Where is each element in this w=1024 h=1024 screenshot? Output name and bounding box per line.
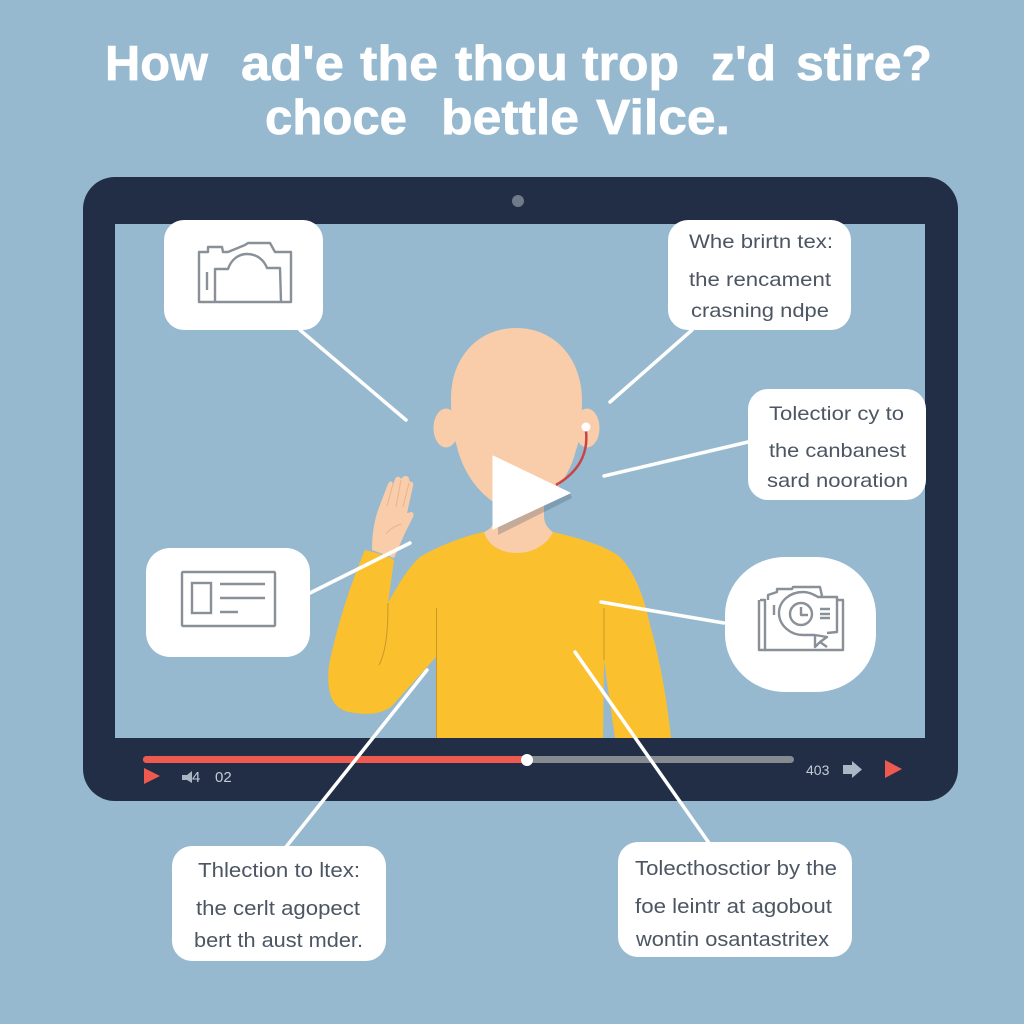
title: ad'e (241, 37, 344, 91)
icon: left play (144, 768, 160, 784)
current time (192, 769, 232, 786)
head and ears (434, 328, 600, 510)
panel: bottom left text card: bert th aust mder. (194, 930, 363, 952)
panel: top right text card: Whe brirtn tex: (689, 231, 833, 253)
panel: middle right text card: the canbanest (769, 440, 907, 462)
neck (482, 495, 554, 567)
panel: middle right text card: sard nooration (767, 470, 908, 492)
panel: id card icon card (146, 548, 310, 657)
icon: forward arrow (843, 761, 862, 778)
title: z'd (711, 37, 776, 91)
title (105, 37, 932, 145)
icon: play button (493, 456, 572, 535)
panel: bottom left text card: Thlection to ltex: (198, 860, 360, 882)
title: stire? (796, 37, 932, 91)
title: bettle (441, 91, 579, 145)
current time: 02 (215, 769, 232, 786)
panel: bottom right text card: wontin osantastritex (635, 929, 829, 951)
icon: camera (199, 243, 291, 302)
icon: raised hand (372, 476, 414, 558)
panel: top right text card: crasning ndpe (691, 300, 829, 322)
panel: bottom right text card: foe leintr at agobout (635, 896, 832, 918)
title: How (105, 37, 209, 91)
panel: bottom right text card (618, 842, 852, 957)
icon: camera with clock (759, 587, 843, 650)
panel: top right text card: the rencament (689, 269, 832, 291)
panel: top right text card (668, 220, 851, 330)
shirt (328, 532, 671, 738)
title: choce (265, 91, 407, 145)
icon: id card (182, 572, 275, 626)
earpiece wire (556, 422, 590, 485)
title: Vilce. (596, 91, 730, 145)
icon: right play (885, 760, 902, 778)
panel: middle right text card: Tolectior cy to (769, 403, 904, 425)
progress bar (143, 754, 794, 766)
presenter figure (328, 328, 671, 738)
title: the (360, 37, 438, 91)
panel: bottom left text card (172, 846, 386, 961)
connector lines (286, 330, 748, 847)
video controls (143, 754, 902, 786)
panel: camera clock icon card (725, 557, 876, 692)
title: thou (455, 37, 568, 91)
panel: camera icon card (164, 220, 323, 330)
panel: bottom right text card: Tolecthosctior by the (635, 858, 837, 880)
title: trop (582, 37, 679, 91)
icon: volume (182, 771, 192, 783)
total time: 403 (806, 762, 830, 778)
video player frame (83, 177, 958, 801)
current time: 4 (192, 769, 200, 786)
panel: middle right text card (748, 389, 926, 500)
panel: bottom left text card: the cerlt agopect (196, 898, 360, 920)
